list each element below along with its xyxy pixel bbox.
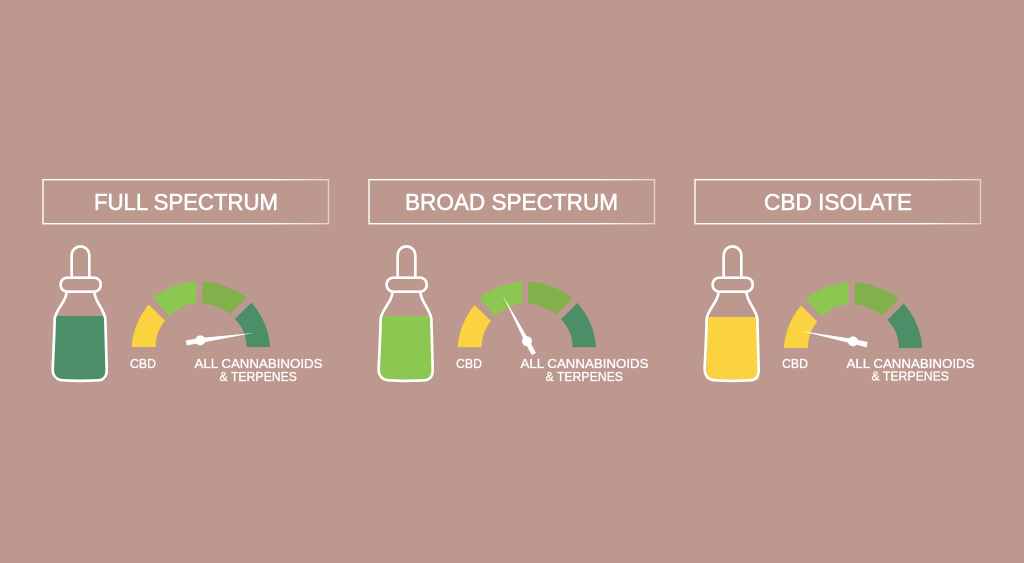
label: CBD: CBD: [782, 357, 808, 371]
gauge segment: mid green: [855, 282, 899, 315]
gauge: needle toward CBD: [784, 282, 922, 348]
label: CBD: CBD: [130, 357, 156, 371]
gauge segment: dark green: [561, 303, 596, 347]
icon: dropper bottle, dark green fill: [53, 246, 107, 381]
gauge: needle toward all cannabinoids and terpenes: [132, 281, 270, 347]
gauge segment: light green: [479, 282, 522, 316]
label: all cannabinoids and terpenes: [194, 357, 322, 384]
icon: dropper bottle, light green fill: [379, 246, 433, 381]
gauge segment: light green: [153, 282, 196, 316]
heading: CBD isolate: [695, 180, 980, 224]
heading: broad spectrum: BROAD SPECTRUM: [405, 189, 618, 215]
gauge segment: yellow: [458, 305, 491, 347]
heading: full spectrum: FULL SPECTRUM: [94, 189, 278, 215]
panel: broad spectrum: [369, 180, 654, 384]
label: all cannabinoids and terpenes: & TERPENES: [872, 370, 949, 384]
panel: full spectrum: [43, 180, 328, 384]
gauge segment: light green: [806, 283, 848, 317]
gauge segment: yellow: [784, 306, 817, 348]
gauge segment: dark green: [235, 303, 270, 347]
label: all cannabinoids and terpenes: [520, 357, 648, 384]
gauge segment: yellow: [132, 305, 165, 347]
label: all cannabinoids and terpenes: ALL CANNABINOIDS: [520, 357, 648, 371]
label: CBD: CBD: [456, 357, 482, 371]
gauge segment: dark green: [887, 304, 922, 348]
heading: CBD isolate: CBD ISOLATE: [764, 189, 912, 215]
label: all cannabinoids and terpenes: & TERPENES: [546, 370, 623, 384]
panel: CBD isolate: [695, 180, 980, 384]
label: all cannabinoids and terpenes: ALL CANNABINOIDS: [194, 357, 322, 371]
heading: broad spectrum: [369, 180, 654, 224]
label: all cannabinoids and terpenes: & TERPENES: [220, 370, 297, 384]
gauge segment: mid green: [528, 282, 573, 314]
label: all cannabinoids and terpenes: ALL CANNABINOIDS: [846, 357, 974, 371]
needle: [801, 331, 868, 347]
heading: full spectrum: [43, 180, 328, 224]
gauge: needle toward mid-low: [458, 282, 596, 355]
label: all cannabinoids and terpenes: [846, 357, 974, 384]
needle: [186, 333, 253, 345]
icon: dropper bottle, yellow fill: [705, 246, 759, 381]
needle: [502, 294, 536, 355]
gauge segment: mid green: [202, 281, 247, 314]
